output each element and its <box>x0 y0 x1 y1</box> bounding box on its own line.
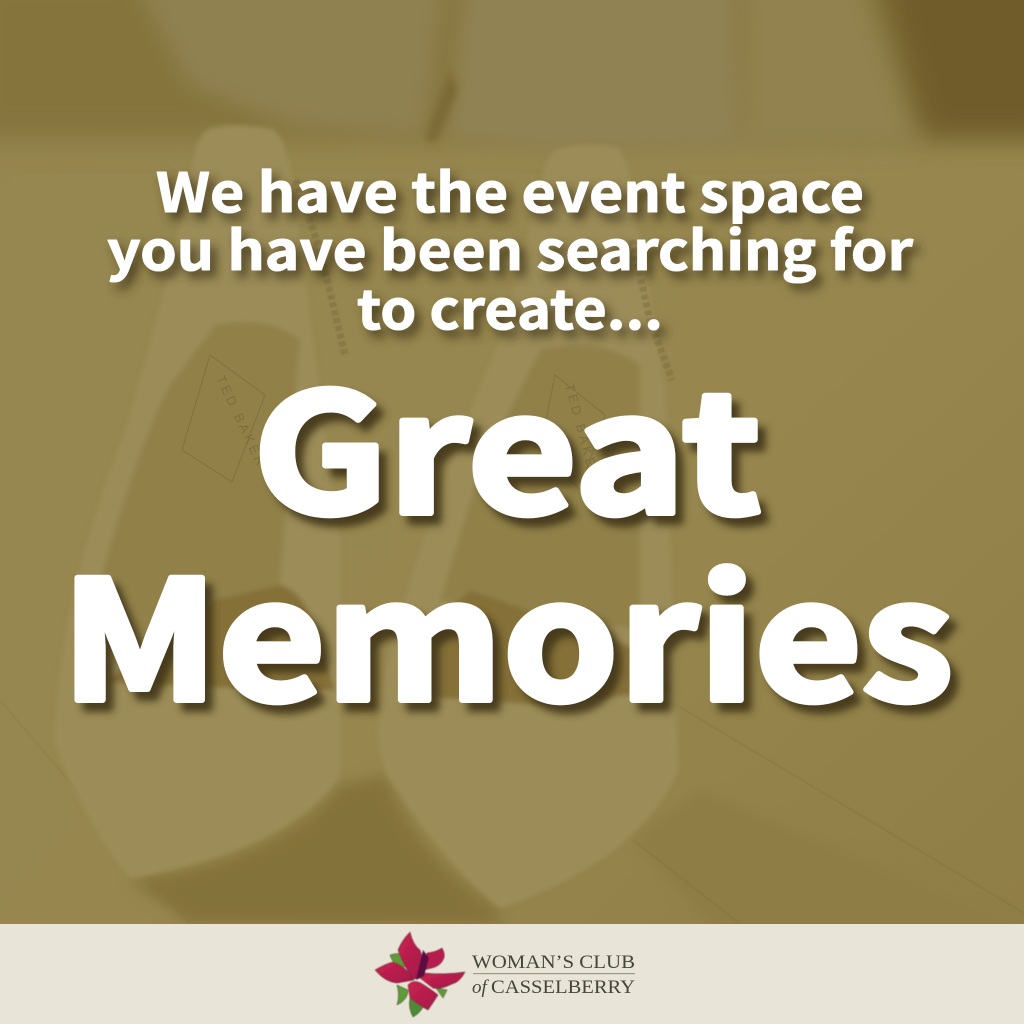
shadow between and under shoes <box>130 775 500 924</box>
intro text: We have the event space <box>156 149 864 228</box>
backdrop: dress folds <box>135 0 915 152</box>
floor plank lines <box>634 708 804 924</box>
right shoe label <box>540 375 605 490</box>
intro text <box>107 149 913 345</box>
intro text: to create... <box>357 266 663 345</box>
backdrop: dark wall band <box>0 0 1024 140</box>
right chain <box>632 240 672 380</box>
backdrop: dress fold shadow <box>425 70 458 142</box>
logo wordmark: CASSELBERRY <box>491 978 635 998</box>
headline: Memories <box>61 509 953 748</box>
left shoe <box>55 125 340 878</box>
logo <box>375 932 635 1017</box>
right shoe <box>378 145 678 908</box>
logo wordmark: of <box>472 977 490 998</box>
right shoe label: TED BAKER <box>562 382 603 483</box>
left shoe label: TED BAKER <box>213 373 269 471</box>
left shoe label <box>182 355 269 482</box>
headline: Great <box>253 322 761 561</box>
icon: hibiscus flower <box>375 932 465 1017</box>
left chain <box>296 180 345 355</box>
intro text: you have been searching for <box>107 207 913 286</box>
logo wordmark <box>472 953 635 998</box>
headline <box>61 322 953 748</box>
footer band <box>0 924 1024 1024</box>
logo wordmark: WOMAN’S CLUB <box>472 953 635 973</box>
